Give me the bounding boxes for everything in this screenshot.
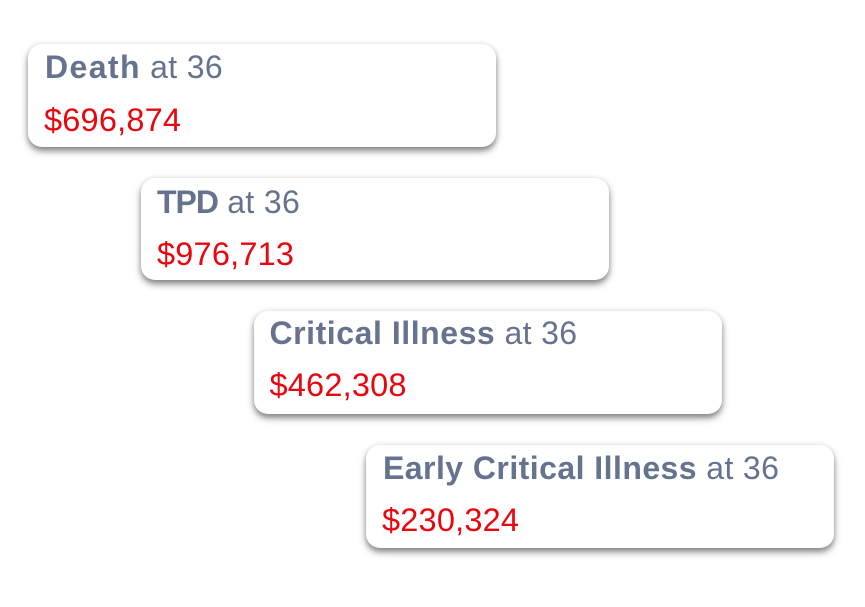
heading: Death at 36: Death at 36 [45,49,223,85]
value: Early Critical Illness amount: $230,324 [382,502,519,538]
panel: Critical Illness card [254,311,722,414]
heading: Critical Illness at 36: Critical Illness at 36 [270,315,577,351]
value: TPD amount: $976,713 [157,236,294,272]
value: Death amount: $696,874 [44,102,181,138]
panel: Death card [28,44,496,147]
panel: Early Critical Illness card [366,445,834,548]
value: Critical Illness amount: $462,308 [270,367,407,403]
panel: TPD card [141,178,609,280]
heading: Early Critical Illness at 36: Early Critical Illness at 36 [383,450,779,486]
heading: TPD at 36: TPD at 36 [157,184,300,220]
